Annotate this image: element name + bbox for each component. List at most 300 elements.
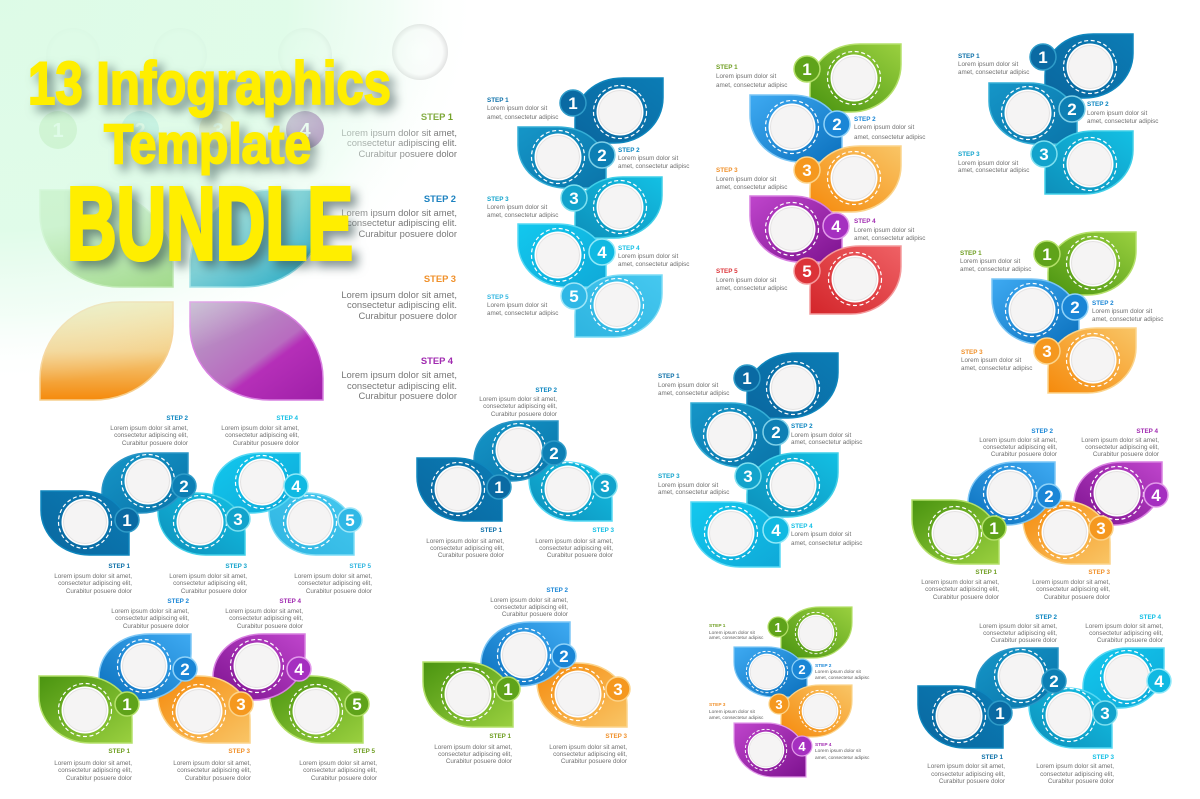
text 1: STEP 1 [709, 623, 726, 629]
badge 5 [561, 283, 587, 309]
leaf 4 [734, 723, 806, 777]
text 5: Lorem ipsum dolor sit amet, [299, 760, 377, 767]
text 1: amet, consectetur adipisc [958, 69, 1029, 76]
badge 1 [988, 701, 1012, 725]
leaf 1 [423, 662, 513, 727]
text 3: Curabitur posuere dolor [561, 758, 627, 765]
text: step 1: consectetur adipiscing elit. [347, 137, 457, 148]
text: step 3: Curabitur posuere dolor [358, 310, 457, 321]
disc 4 [230, 640, 284, 692]
text 3: STEP 3 [605, 733, 627, 740]
badge 3 [1034, 338, 1060, 364]
badge 4: 4 [1151, 486, 1161, 505]
badge 2: 2 [559, 647, 569, 666]
disc 2 [746, 651, 788, 693]
text 2: Curabitur posuere dolor [491, 411, 557, 418]
text 4: amet, consectetur adipisc [815, 755, 870, 761]
leaf 1 [810, 44, 901, 112]
disc 3 [828, 152, 880, 204]
badge 2: 2 [1067, 100, 1077, 119]
badge 5 [338, 508, 362, 532]
leaf 5 [270, 676, 363, 743]
text 3: consectetur adipiscing elit, [173, 580, 247, 587]
panel: horizontal blue 5 steps [41, 415, 372, 595]
text 1: Lorem ipsum dolor sit [658, 382, 718, 389]
text 2: STEP 2 [1092, 300, 1114, 307]
text 5: consectetur adipiscing elit, [298, 580, 372, 587]
disc 4 [1090, 466, 1144, 520]
disc 1 [928, 506, 982, 560]
badge 1: 1 [494, 478, 504, 497]
text 1: consectetur adipiscing elit, [931, 771, 1005, 778]
badge 5: 5 [569, 287, 579, 306]
text 5: STEP 5 [349, 563, 371, 570]
text 2: consectetur adipiscing elit, [494, 604, 568, 611]
badge 4: 4 [597, 243, 607, 262]
text 1: amet, consectetur adipisc [960, 266, 1031, 273]
text 1: Curabitur posuere dolor [66, 775, 132, 782]
text 4: amet, consectetur adipisc [854, 235, 925, 242]
text 2: Lorem ipsum dolor sit amet, [490, 597, 568, 604]
text 3: Lorem ipsum dolor sit amet, [549, 744, 627, 751]
disc 3 [799, 690, 841, 732]
text 4: STEP 4 [1136, 428, 1158, 435]
badge 5: 5 [345, 511, 355, 530]
leaf 4 [750, 196, 842, 262]
badge 2 [763, 419, 789, 445]
text 2: STEP 2 [166, 415, 188, 422]
badge 3 [794, 157, 820, 183]
text 4: STEP 4 [815, 742, 832, 748]
leaf 1 [918, 686, 1003, 748]
badge: step 1: 1 [52, 120, 64, 142]
text 3: Curabitur posuere dolor [1044, 594, 1110, 601]
text 4: Lorem ipsum dolor sit [854, 227, 914, 234]
text: step 4: STEP 4 [421, 355, 454, 366]
disc 4 [236, 456, 288, 508]
text 1: consectetur adipiscing elit, [430, 545, 504, 552]
panel: horizontal colour 4 steps [912, 428, 1168, 601]
badge 4: 4 [294, 660, 304, 679]
badge 1: 1 [989, 519, 999, 538]
panel: horizontal colour 3 steps [423, 587, 630, 765]
badge 3 [769, 694, 789, 714]
badge 1: 1 [774, 620, 782, 635]
text 2: Lorem ipsum dolor sit [815, 669, 862, 675]
panel: vertical colour 5 steps [716, 44, 925, 314]
badge 1: 1 [122, 695, 132, 714]
text 2: Curabitur posuere dolor [123, 623, 189, 630]
leaf 3 [1045, 131, 1133, 194]
disc 4 [766, 202, 818, 256]
leaf 3 [575, 177, 662, 238]
badge 4 [1147, 669, 1171, 693]
disc 3 [174, 496, 226, 548]
badge 3 [606, 677, 630, 701]
disc 3 [1042, 688, 1096, 742]
panel: vertical blue 4 steps [658, 353, 862, 567]
badge 4 [284, 474, 308, 498]
title line 2: Template [104, 112, 311, 175]
leaf 1 [41, 491, 129, 555]
text 1: Lorem ipsum dolor sit [716, 73, 776, 80]
leaf 3 [537, 663, 627, 727]
leaf 3 [1029, 688, 1112, 748]
disc 1 [58, 496, 112, 548]
disc 2 [122, 454, 174, 508]
text 3: STEP 3 [958, 151, 980, 158]
text 2: STEP 2 [1087, 101, 1109, 108]
text 4: Lorem ipsum dolor sit [618, 253, 678, 260]
text 5: Curabitur posuere dolor [306, 588, 372, 595]
text 2: consectetur adipiscing elit, [483, 403, 557, 410]
text 3: STEP 3 [658, 473, 680, 480]
text: step 3: consectetur adipiscing elit. [347, 299, 457, 310]
text 4: STEP 4 [276, 415, 298, 422]
text 3: consectetur adipiscing elit, [1040, 771, 1114, 778]
text 1: Lorem ipsum dolor sit [958, 61, 1018, 68]
badge 3: 3 [236, 695, 246, 714]
leaf 1 [912, 500, 999, 564]
text 4: consectetur adipiscing elit, [229, 615, 303, 622]
leaf 2 [518, 127, 606, 188]
text 2: consectetur adipiscing elit, [114, 432, 188, 439]
disc 2 [118, 640, 170, 692]
text: step 1: Lorem ipsum dolor sit amet, [341, 127, 457, 138]
leaf 4 [213, 634, 305, 700]
badge: step 2 [121, 111, 159, 149]
text 3: Lorem ipsum dolor sit [716, 176, 776, 183]
text 2: consectetur adipiscing elit, [983, 444, 1057, 451]
panel: small vertical colour 4 steps [709, 607, 870, 777]
leaf 4 [1074, 462, 1162, 525]
leaf 2 [976, 648, 1058, 708]
text 2: Lorem ipsum dolor sit amet, [479, 396, 557, 403]
leaf 4 [518, 224, 606, 287]
text 2: Lorem ipsum dolor sit amet, [979, 623, 1057, 630]
badge 2: 2 [179, 477, 189, 496]
badge: step 4 [286, 111, 324, 149]
text: step 4: Lorem ipsum dolor sit amet, [341, 369, 457, 380]
disc 2 [766, 100, 818, 154]
disc 5 [290, 684, 342, 738]
text 2: Lorem ipsum dolor sit [618, 155, 678, 162]
disc 2 [1002, 86, 1054, 140]
text 3: STEP 3 [1088, 569, 1110, 576]
text 2: STEP 2 [535, 387, 557, 394]
leaf 5 [810, 246, 901, 314]
badge 2 [589, 142, 615, 168]
badge: step 3: 3 [212, 120, 224, 142]
badge 1 [982, 516, 1006, 540]
panel: horizontal colour 5 steps [39, 598, 377, 782]
text 4: Curabitur posuere dolor [233, 440, 299, 447]
text 3: STEP 3 [592, 527, 614, 534]
text: step 3: Lorem ipsum dolor sit amet, [341, 289, 457, 300]
badge 3: 3 [233, 510, 243, 529]
text 1: Lorem ipsum dolor sit amet, [921, 579, 999, 586]
text 3: Lorem ipsum dolor sit [958, 160, 1018, 167]
text 3: STEP 3 [1092, 754, 1114, 761]
leaf 1 [1045, 34, 1133, 98]
text: step 2: consectetur adipiscing elit. [347, 217, 457, 228]
badge 5: 5 [352, 695, 362, 714]
text 1: Curabitur posuere dolor [933, 594, 999, 601]
badge 1 [115, 692, 139, 716]
text 4: Lorem ipsum dolor sit amet, [221, 425, 299, 432]
disc 4 [532, 228, 584, 282]
text 3: amet, consectetur adipisc [958, 167, 1029, 174]
badge 2: 2 [1044, 487, 1054, 506]
text 1: Lorem ipsum dolor sit [960, 258, 1020, 265]
disc 3 [594, 180, 646, 234]
badge 1: 1 [995, 704, 1005, 723]
badge 3: 3 [775, 697, 783, 712]
text 1: STEP 1 [975, 569, 997, 576]
badge 2 [824, 111, 850, 137]
badge 1 [496, 677, 520, 701]
disc 5 [590, 278, 644, 332]
disc 2 [1006, 284, 1058, 336]
badge 2 [552, 644, 576, 668]
text 3: amet, consectetur adipisc [658, 489, 729, 496]
leaf 5 [575, 275, 662, 337]
text 5: consectetur adipiscing elit, [303, 767, 377, 774]
badge 3: 3 [600, 477, 610, 496]
text 2: amet, consectetur adipisc [854, 134, 925, 141]
text 4: STEP 4 [854, 218, 876, 225]
text 1: STEP 1 [480, 527, 502, 534]
badge 3: 3 [1100, 704, 1110, 723]
leaf 3 [747, 453, 838, 517]
text 2: amet, consectetur adipisc [1092, 316, 1163, 323]
leaf: cyan [190, 190, 323, 287]
text 1: consectetur adipiscing elit, [58, 767, 132, 774]
text 4: STEP 4 [791, 523, 813, 530]
text 2: Lorem ipsum dolor sit amet, [979, 437, 1057, 444]
text 2: STEP 2 [167, 598, 189, 605]
badge 3 [1089, 516, 1113, 540]
badge 4 [287, 657, 311, 681]
text 5: Lorem ipsum dolor sit [716, 277, 776, 284]
badge 4 [823, 213, 849, 239]
leaf: purple [190, 302, 323, 400]
text 1: STEP 1 [487, 97, 509, 104]
text 2: Curabitur posuere dolor [991, 451, 1057, 458]
badge 2: 2 [1070, 298, 1080, 317]
haze: green glow behind title [0, 0, 480, 385]
text 1: Lorem ipsum dolor sit amet, [426, 538, 504, 545]
badge: step 2: 2 [134, 120, 146, 142]
text 2: Lorem ipsum dolor sit [854, 124, 914, 131]
leaf: orange [40, 302, 173, 400]
text: step 1: Curabitur posuere dolor [358, 148, 457, 159]
text 2: STEP 2 [1031, 428, 1053, 435]
text 5: STEP 5 [716, 268, 738, 275]
text 2: STEP 2 [791, 423, 813, 430]
badge 4 [763, 517, 789, 543]
text 4: Curabitur posuere dolor [237, 623, 303, 630]
badge 1: 1 [568, 94, 578, 113]
badge 4: 4 [291, 477, 301, 496]
text 3: STEP 3 [225, 563, 247, 570]
text 3: Curabitur posuere dolor [181, 588, 247, 595]
disc 3 [1064, 138, 1116, 190]
text 2: Lorem ipsum dolor sit amet, [110, 425, 188, 432]
badge 1: 1 [742, 369, 752, 388]
disc: step 3 [278, 28, 332, 82]
text 3: Curabitur posuere dolor [547, 552, 613, 559]
disc 1 [594, 86, 646, 138]
text 3: Lorem ipsum dolor sit amet, [535, 538, 613, 545]
text 5: STEP 5 [487, 294, 509, 301]
text: step 3: STEP 3 [424, 273, 456, 284]
text 3: STEP 3 [709, 702, 726, 708]
text 1: amet, consectetur adipisc [658, 390, 729, 397]
disc 2 [498, 628, 550, 682]
text 1: amet, consectetur adipisc [716, 82, 787, 89]
badge 2: 2 [549, 444, 559, 463]
leaf 2 [481, 622, 570, 686]
badge: step 3 [199, 111, 237, 149]
text: step 4: consectetur adipiscing elit. [347, 380, 457, 391]
leaf 4 [691, 502, 780, 567]
text 3: STEP 3 [961, 349, 983, 356]
leaf: green [40, 190, 173, 287]
text 5: amet, consectetur adipisc [716, 285, 787, 292]
panel: vertical colour 3 steps [960, 232, 1163, 393]
badge 1 [1030, 44, 1056, 70]
text 1: STEP 1 [108, 748, 130, 755]
badge 4: 4 [1154, 672, 1164, 691]
badge 1 [734, 365, 760, 391]
disc 1 [432, 462, 484, 516]
leaf 5 [269, 493, 354, 555]
badge 4: 4 [798, 739, 806, 754]
text 1: Lorem ipsum dolor sit amet, [434, 744, 512, 751]
text 2: STEP 2 [618, 147, 640, 154]
disc 2 [704, 408, 756, 462]
panel: vertical blue 3 steps [958, 34, 1158, 194]
badge 1 [794, 56, 820, 82]
disc 4 [704, 506, 758, 560]
badge 5 [345, 692, 369, 716]
text 2: Lorem ipsum dolor sit amet, [111, 608, 189, 615]
text 4: consectetur adipiscing elit, [1085, 444, 1159, 451]
text 2: Lorem ipsum dolor sit [1092, 308, 1152, 315]
leaf 3 [1048, 328, 1136, 393]
leaf 2 [99, 634, 191, 700]
badge 2 [173, 657, 197, 681]
badge 3: 3 [569, 189, 579, 208]
text 4: Lorem ipsum dolor sit amet, [1085, 623, 1163, 630]
badge 2: 2 [180, 660, 190, 679]
text 1: Lorem ipsum dolor sit [487, 105, 547, 112]
disc 2 [984, 466, 1036, 520]
badge: step 4: 4 [299, 120, 311, 142]
panel: flower infographic with 4 steps [39, 24, 457, 401]
panel: horizontal blue 3 steps [417, 387, 617, 559]
title line 3: BUNDLE [67, 166, 353, 281]
text 3: consectetur adipiscing elit, [553, 751, 627, 758]
text 2: consectetur adipiscing elit, [983, 630, 1057, 637]
leaf 2 [102, 453, 188, 513]
badge 2 [1042, 669, 1066, 693]
badge 3 [1031, 141, 1057, 167]
text 4: Lorem ipsum dolor sit amet, [1081, 437, 1159, 444]
leaf 2 [734, 647, 807, 697]
badge 1: 1 [1042, 245, 1052, 264]
text 3: STEP 3 [487, 196, 509, 203]
text 2: STEP 2 [546, 587, 568, 594]
disc 1 [1066, 236, 1120, 290]
badge 2 [792, 659, 812, 679]
leaf 2 [968, 462, 1055, 525]
text 5: Lorem ipsum dolor sit [487, 302, 547, 309]
text 5: Lorem ipsum dolor sit amet, [294, 573, 372, 580]
text 4: Lorem ipsum dolor sit [815, 748, 862, 754]
disc 1 [795, 612, 837, 654]
disc: step 4 [392, 24, 448, 80]
badge 5: 5 [802, 262, 812, 281]
badge 3 [735, 463, 761, 489]
badge 2 [1037, 484, 1061, 508]
leaf 4 [1083, 648, 1164, 708]
text 1: Curabitur posuere dolor [939, 778, 1005, 785]
disc 1 [1064, 40, 1116, 94]
text 5: Curabitur posuere dolor [311, 775, 377, 782]
text 2: STEP 2 [854, 116, 876, 123]
badge 3 [561, 185, 587, 211]
text 2: consectetur adipiscing elit, [115, 615, 189, 622]
badge 1: 1 [1038, 48, 1048, 67]
badge 2 [1062, 294, 1088, 320]
text 1: amet, consectetur adipisc [487, 114, 558, 121]
badge 2 [1059, 96, 1085, 122]
text 2: amet, consectetur adipisc [618, 163, 689, 170]
leaf 1 [39, 676, 132, 743]
badge 3 [1093, 701, 1117, 725]
badge 3: 3 [1042, 342, 1052, 361]
leaf 1 [575, 78, 663, 143]
panel: horizontal blue 4 steps [918, 614, 1171, 785]
text 3: Lorem ipsum dolor sit amet, [173, 760, 251, 767]
text 1: STEP 1 [981, 754, 1003, 761]
text 2: amet, consectetur adipisc [791, 439, 862, 446]
leaf 3 [529, 462, 612, 521]
text 2: Lorem ipsum dolor sit [1087, 110, 1147, 117]
leaf 3 [810, 146, 901, 212]
text 1: STEP 1 [960, 250, 982, 257]
leaf 1 [747, 353, 838, 418]
title line 1: 13 Infographics [28, 50, 391, 117]
disc 2 [492, 424, 546, 476]
text 3: Curabitur posuere dolor [1048, 778, 1114, 785]
badge 3: 3 [1096, 519, 1106, 538]
badge 1: 1 [122, 511, 132, 530]
disc: step 2 [153, 28, 207, 82]
text 3: consectetur adipiscing elit, [539, 545, 613, 552]
disc 2 [532, 130, 584, 184]
text 2: STEP 2 [815, 663, 832, 669]
text 4: consectetur adipiscing elit, [1089, 630, 1163, 637]
text 2: STEP 2 [1035, 614, 1057, 621]
disc 5 [828, 252, 882, 306]
text 1: STEP 1 [716, 64, 738, 71]
badge 2: 2 [1049, 672, 1059, 691]
text 1: STEP 1 [658, 373, 680, 380]
disc 5 [284, 496, 336, 548]
